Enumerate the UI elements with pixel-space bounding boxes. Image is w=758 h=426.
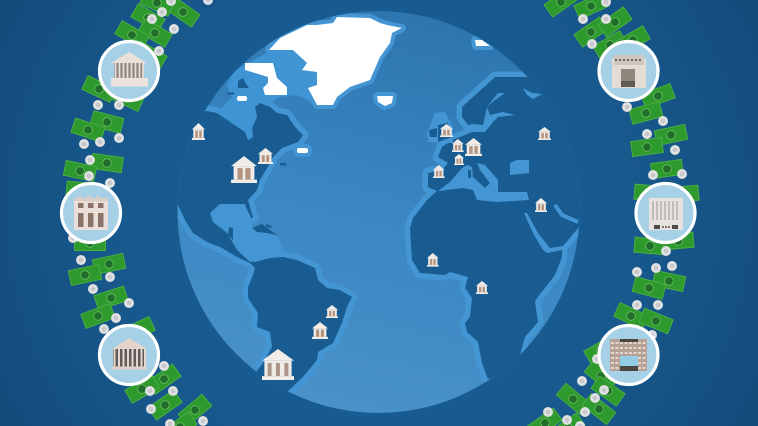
- bank: Spain: [433, 165, 445, 178]
- Greenland and Arctic ice: [237, 17, 490, 153]
- bank icons on the map: [192, 123, 551, 380]
- badge: office tower, middle right: [636, 184, 695, 242]
- bank: Argentina: [262, 349, 294, 380]
- bank: West Africa: [427, 253, 439, 267]
- bank: Central Africa: [476, 281, 488, 294]
- coast halo: Old World: [404, 72, 580, 382]
- money ring: right: [528, 0, 699, 426]
- bank: USA small: [258, 148, 273, 164]
- Gulf of Mexico and Caribbean: [212, 206, 285, 262]
- bank: Brazil south: [312, 322, 328, 339]
- bank: Switzerland: [454, 154, 464, 165]
- coast halo: Americas: [178, 102, 358, 394]
- bank: UK: [440, 124, 453, 137]
- bank: Netherlands: [452, 139, 464, 152]
- Arctic Canada and Hudson Bay: [217, 50, 317, 140]
- bank: Brazil north: [326, 305, 338, 318]
- bank: Russia: [538, 127, 551, 140]
- badge: gateway building, upper right: [599, 42, 658, 100]
- bank: Germany: [465, 138, 482, 156]
- Mediterranean, Baltic and Black seas: [427, 88, 578, 222]
- badge: columned bank, lower left: [100, 326, 158, 384]
- badge: temple, upper left: [100, 42, 158, 100]
- land: Europe, Africa and Asia: [410, 77, 580, 380]
- globe: [178, 11, 580, 413]
- land: Americas: [178, 103, 352, 392]
- bank: USA large: [231, 156, 257, 183]
- badge: twin tower bank, lower right: [599, 326, 658, 384]
- islands dark: [227, 78, 471, 240]
- badge: arcaded building, middle left: [62, 184, 120, 242]
- Greenland and Arctic ice halo: [269, 17, 490, 153]
- bank: Canada: [192, 123, 205, 140]
- money ring: left: [63, 0, 213, 426]
- bank: Middle East: [535, 198, 547, 212]
- globe ocean: [178, 11, 580, 413]
